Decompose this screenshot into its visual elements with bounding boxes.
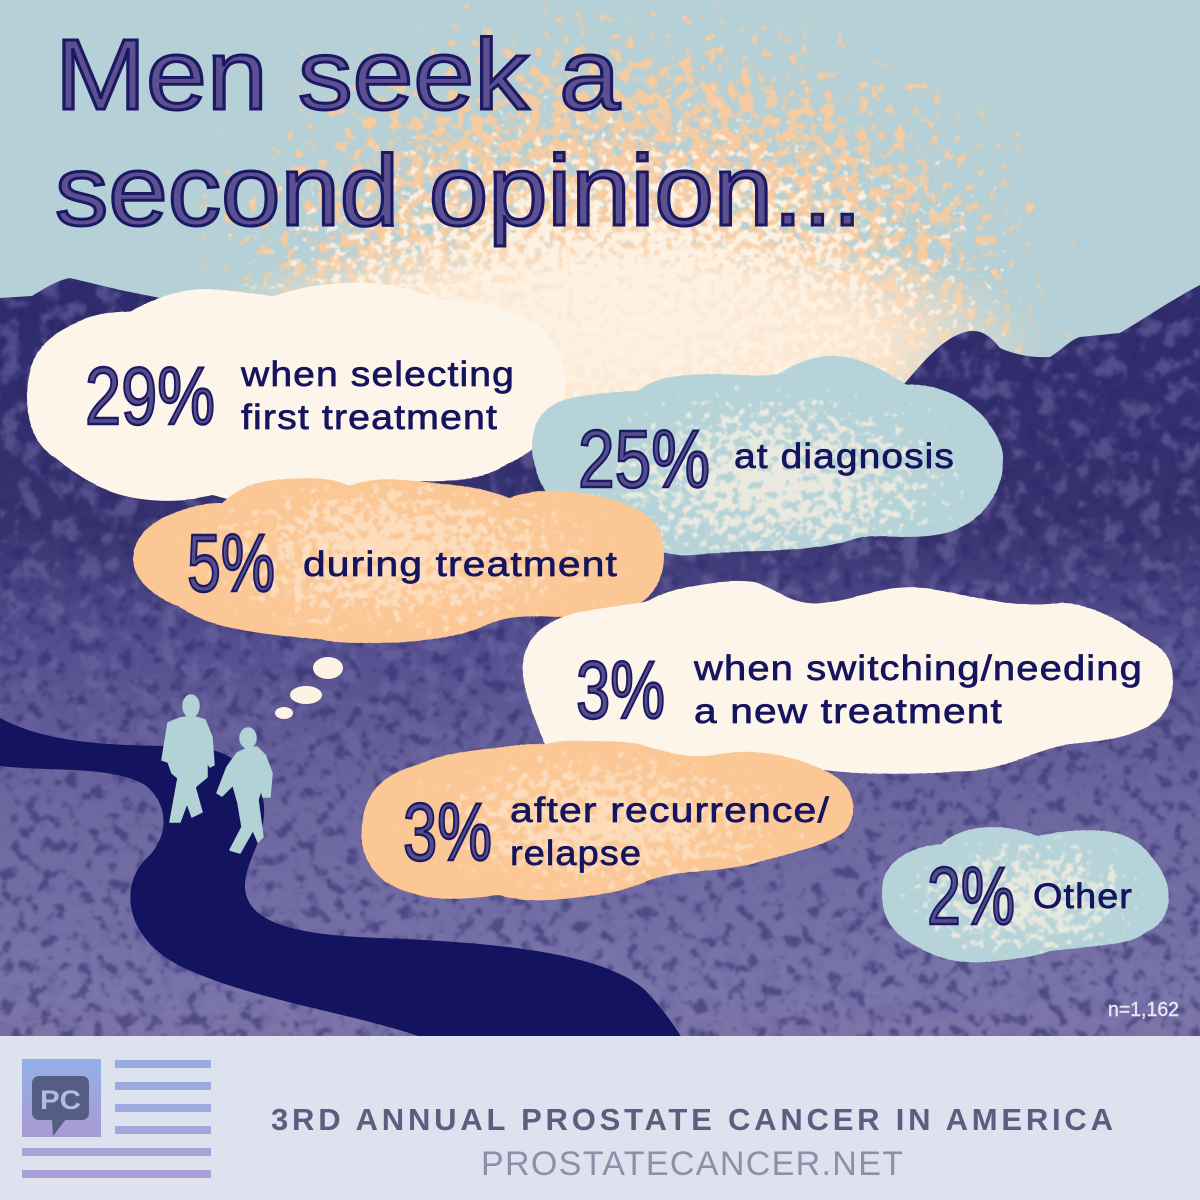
cloud: 25% at diagnosis: at diagnosis	[734, 437, 955, 476]
footer band	[0, 1036, 1200, 1200]
cloud: 3% after recurrence or relapse: 3%	[403, 787, 492, 878]
cloud: 3% when switching or needing a new treatment	[523, 581, 1173, 774]
cloud: 3% after recurrence or relapse: after recurrence/	[510, 791, 830, 830]
walking figures	[162, 695, 272, 853]
cloud: 29% when selecting first treatment: 29%	[85, 351, 215, 442]
cloud: 3% when switching or needing a new treatment: 3%	[576, 645, 665, 736]
sample size note: n=1,162	[1108, 999, 1179, 1021]
footer website: PROSTATECANCER.NET	[481, 1145, 903, 1183]
figure: left man	[162, 695, 214, 822]
speckled peach glow	[100, 0, 1160, 580]
title	[55, 19, 862, 247]
icon: PC logo document	[22, 1059, 211, 1178]
cloud: 2% other: 2%	[927, 851, 1015, 942]
cloud: 2% other: Other	[1033, 877, 1133, 916]
cloud: 3% after recurrence or relapse	[361, 740, 854, 900]
cloud: 29% when selecting first treatment: when selecting	[240, 355, 515, 394]
icon: PC logo document: PC	[40, 1085, 81, 1115]
title: second opinion...	[55, 135, 862, 247]
thought bubbles	[275, 657, 343, 719]
cloud: 5% during treatment: during treatment	[303, 545, 618, 584]
cloud: 5% during treatment	[132, 478, 664, 644]
cloud: 29% when selecting first treatment: first treatment	[241, 398, 498, 437]
winding river path	[0, 718, 682, 1038]
cloud: 25% at diagnosis: 25%	[578, 414, 710, 505]
cloud: 5% during treatment: 5%	[187, 518, 275, 609]
mountains and textured hillside	[0, 270, 1200, 1040]
cloud: 29% when selecting first treatment	[25, 282, 564, 507]
cloud: 3% when switching or needing a new treatment: when switching/needing	[693, 649, 1143, 688]
cloud: 3% when switching or needing a new treatment: a new treatment	[694, 692, 1003, 731]
figure: right man	[217, 728, 272, 853]
title: Men seek a	[55, 19, 620, 131]
cloud: 25% at diagnosis	[532, 356, 1003, 556]
footer heading: 3RD ANNUAL PROSTATE CANCER IN AMERICA	[271, 1102, 1113, 1137]
cloud: 2% other	[882, 826, 1169, 963]
cloud: 3% after recurrence or relapse: relapse	[510, 834, 642, 873]
